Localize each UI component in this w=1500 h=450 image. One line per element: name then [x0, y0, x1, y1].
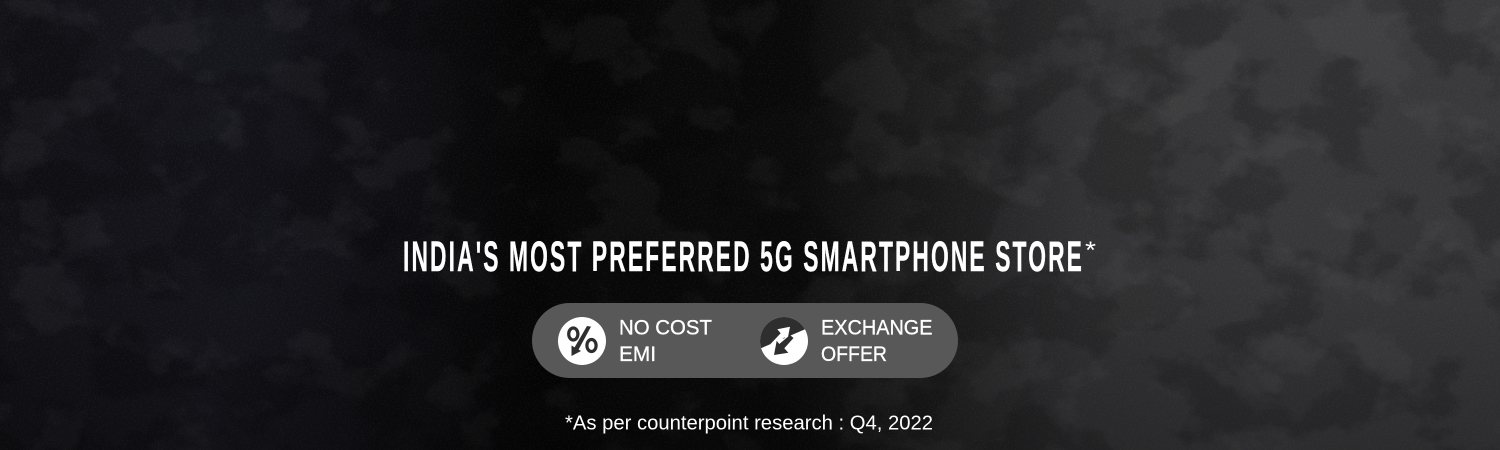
footnote: *As per counterpoint research : Q4, 2022	[565, 412, 933, 434]
offers pill	[532, 303, 958, 378]
dark arrow	[774, 335, 794, 355]
text: no cost emi: NO COST	[619, 316, 712, 340]
text: exchange offer	[821, 316, 932, 366]
text: no cost emi	[619, 316, 712, 366]
icon: percent	[558, 317, 606, 365]
text: exchange offer: EXCHANGE	[821, 316, 932, 340]
text: no cost emi: EMI	[619, 342, 656, 366]
white arrow	[770, 327, 790, 347]
text: exchange offer: OFFER	[821, 342, 887, 366]
icon: exchange arrows	[760, 317, 808, 365]
heading: *	[1085, 237, 1096, 264]
